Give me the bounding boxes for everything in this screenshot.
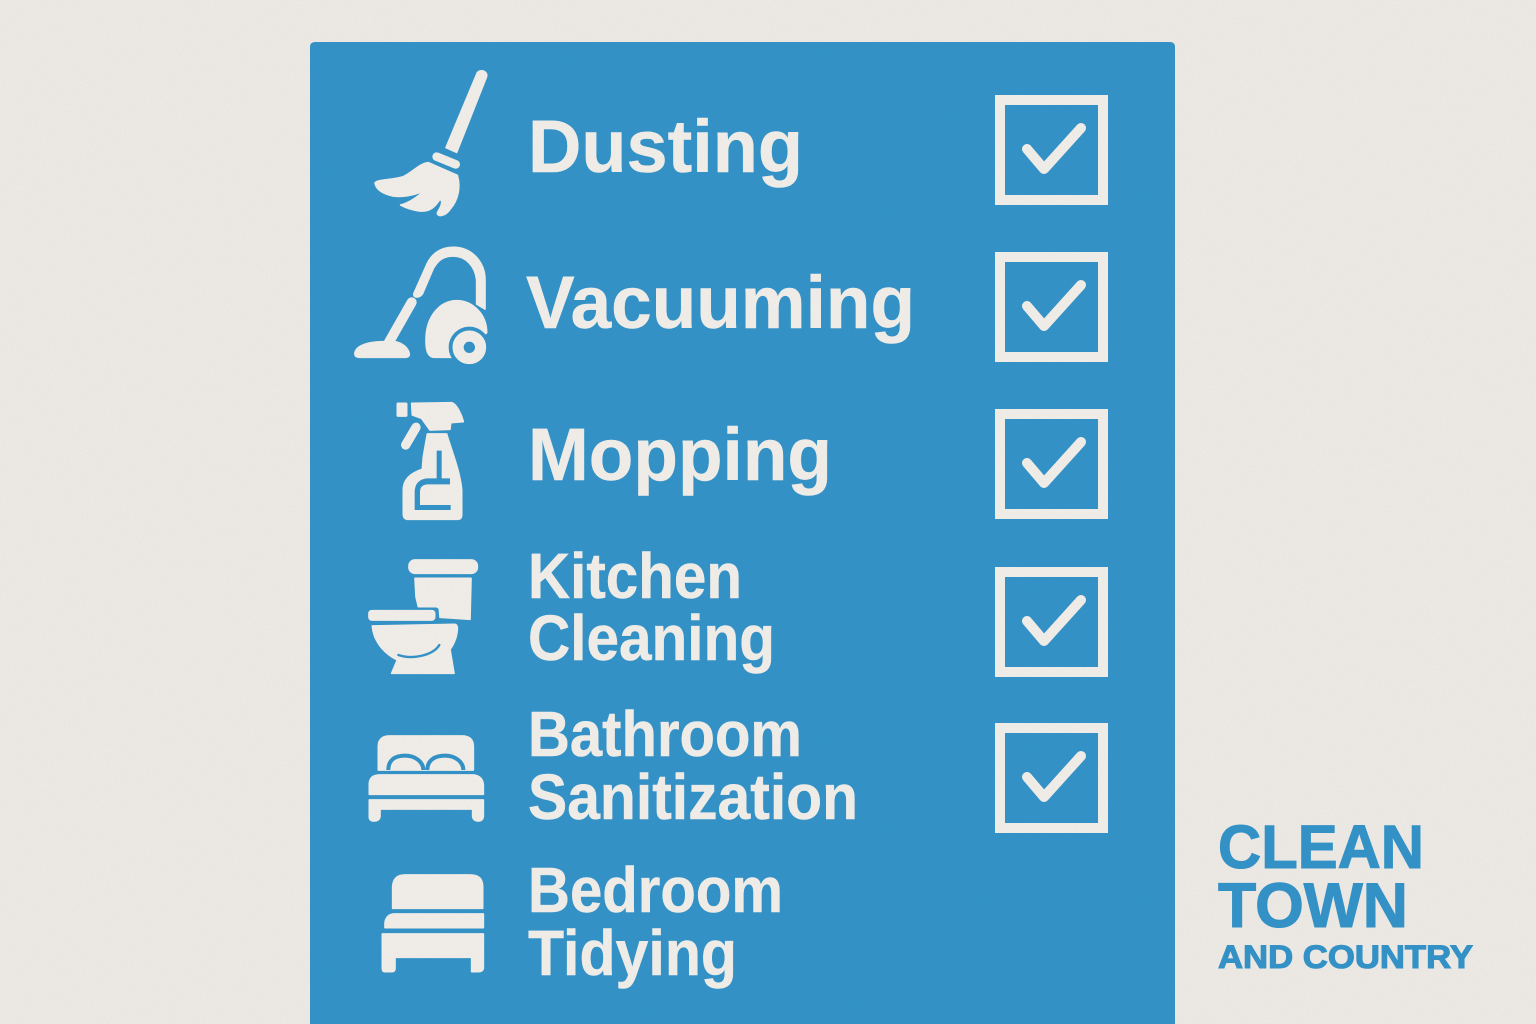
label: Bedroom Tidying (528, 854, 783, 989)
panel: blue services list (310, 42, 1175, 1024)
label: Dusting: Dusting (528, 105, 803, 188)
label: Bedroom Tidying: Bedroom (528, 854, 783, 926)
label: Kitchen Cleaning: Cleaning (528, 602, 775, 674)
icon: vacuum cleaner (355, 247, 490, 368)
label: Mopping: Mopping (528, 413, 832, 496)
icon: spray bottle (397, 403, 463, 519)
logo: Clean Town and Country: CLEAN (1218, 813, 1424, 881)
label: Bathroom Sanitization: Sanitization (528, 761, 858, 833)
label: Kitchen Cleaning: Kitchen (528, 540, 742, 612)
logo: Clean Town and Country: AND COUNTRY (1218, 939, 1473, 975)
icon: toilet (369, 560, 477, 673)
logo: Clean Town and Country: TOWN (1218, 871, 1408, 941)
label: Kitchen Cleaning (528, 540, 775, 674)
label: Bathroom Sanitization: Bathroom (528, 698, 802, 770)
label: Bathroom Sanitization (528, 698, 858, 833)
label: Bedroom Tidying: Tidying (528, 917, 737, 989)
icon: double bed (369, 736, 483, 821)
checkbox: Kitchen Cleaning (1000, 572, 1103, 672)
checkbox: Dusting (1000, 100, 1103, 200)
label: Vacuuming: Vacuuming (526, 261, 915, 344)
checkbox: Mopping (1000, 414, 1103, 514)
checkbox: Bathroom Sanitization (1000, 728, 1103, 828)
icon: single bed (382, 875, 483, 972)
icon: broom (375, 71, 487, 215)
logo: Clean Town and Country (1218, 813, 1473, 975)
checkbox: Vacuuming (1000, 257, 1103, 357)
